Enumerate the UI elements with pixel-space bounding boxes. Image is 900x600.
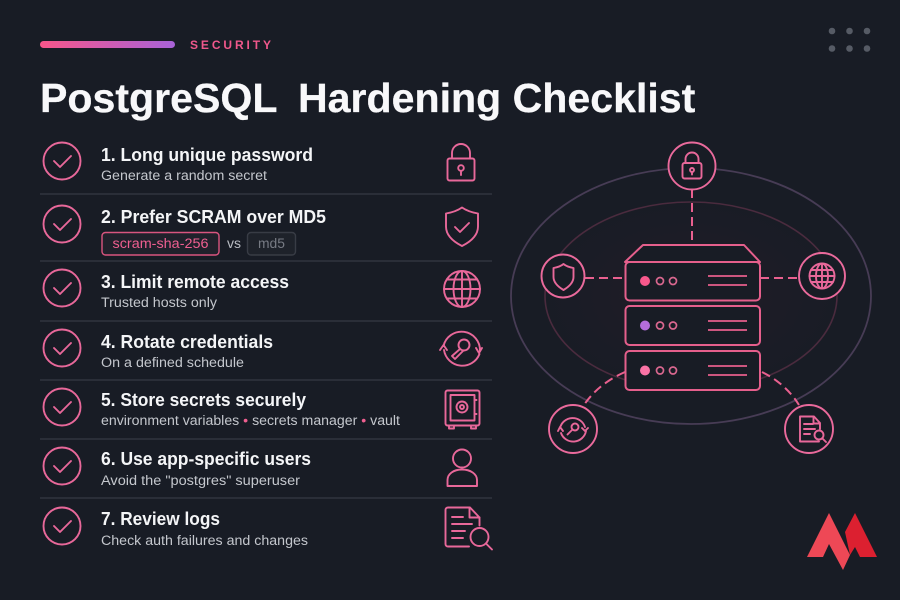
server unit 3	[626, 351, 760, 390]
icon: document with magnifier	[446, 508, 492, 550]
icon: rotating key	[440, 332, 482, 366]
connector: left	[585, 277, 625, 279]
icon: safe	[446, 390, 480, 428]
icon: padlock	[448, 144, 474, 180]
item 4 heading: 4. Rotate credentials	[101, 332, 273, 352]
item 6 heading: 6. Use app-specific users	[101, 449, 311, 469]
item 4: rotate credentials	[44, 330, 482, 370]
node: globe	[799, 253, 845, 299]
icon: shield with check	[446, 208, 478, 246]
item 3 heading: 3. Limit remote access	[101, 272, 289, 292]
outer orbit ellipse	[511, 168, 871, 424]
server stack	[625, 245, 760, 390]
item 7 heading: 7. Review logs	[101, 509, 220, 529]
pill: scram-sha-256: scram-sha-256	[112, 236, 208, 251]
server unit 2	[626, 306, 760, 345]
item 2 heading: 2. Prefer SCRAM over MD5	[101, 207, 326, 227]
icon: globe	[444, 271, 480, 307]
decorative dot grid icon	[829, 28, 870, 52]
check icon 1	[44, 142, 80, 180]
item 3 description: Trusted hosts only	[101, 295, 217, 310]
pill: md5	[248, 232, 296, 255]
pill: scram-sha-256	[102, 232, 219, 255]
check icon 6	[44, 448, 80, 484]
check icon 5	[44, 388, 80, 426]
connector: top	[691, 189, 693, 245]
node: shield	[542, 254, 584, 298]
item 6: use app-specific users	[44, 448, 477, 488]
check icon 3	[44, 270, 80, 306]
item 1 heading: 1. Long unique password	[101, 145, 313, 165]
versus label: vs	[227, 236, 241, 251]
item 6 description: Avoid the "postgres" superuser	[101, 473, 301, 488]
title: Hardening Checklist	[298, 75, 696, 121]
server top cap	[625, 245, 760, 262]
item 7: review logs	[44, 508, 492, 550]
brand logo	[807, 513, 877, 570]
node: lock	[668, 142, 716, 190]
item 7 description: Check auth failures and changes	[101, 533, 308, 548]
inner orbit ellipse	[545, 202, 837, 390]
panel: checklist	[44, 142, 492, 550]
item 5 description: environment variables • secrets manager • vault	[101, 413, 400, 428]
title: PostgreSQL	[40, 75, 277, 121]
icon: user	[448, 450, 477, 486]
connector: bottom right	[762, 372, 799, 405]
item 3: limit remote access	[44, 270, 480, 310]
connector: right	[760, 277, 799, 279]
item 4 description: On a defined schedule	[101, 355, 244, 370]
check icon 7	[44, 508, 80, 544]
node: document search	[785, 405, 833, 453]
item 1: long unique password	[44, 142, 474, 183]
node: rotating key	[549, 405, 597, 453]
connector: bottom left	[584, 372, 625, 405]
item 2: prefer scram over md5	[44, 206, 478, 255]
check icon 4	[44, 330, 80, 366]
eyebrow label: security: SECURITY	[190, 38, 271, 52]
item 1 description: Generate a random secret	[101, 168, 267, 183]
header accent bar	[40, 41, 175, 48]
check icon 2	[44, 206, 80, 242]
server unit 1	[626, 262, 760, 300]
item 5 heading: 5. Store secrets securely	[101, 390, 306, 410]
pill: md5: md5	[258, 236, 285, 251]
diagram: server hub and security nodes	[511, 142, 871, 453]
item 5: store secrets securely	[44, 388, 480, 428]
